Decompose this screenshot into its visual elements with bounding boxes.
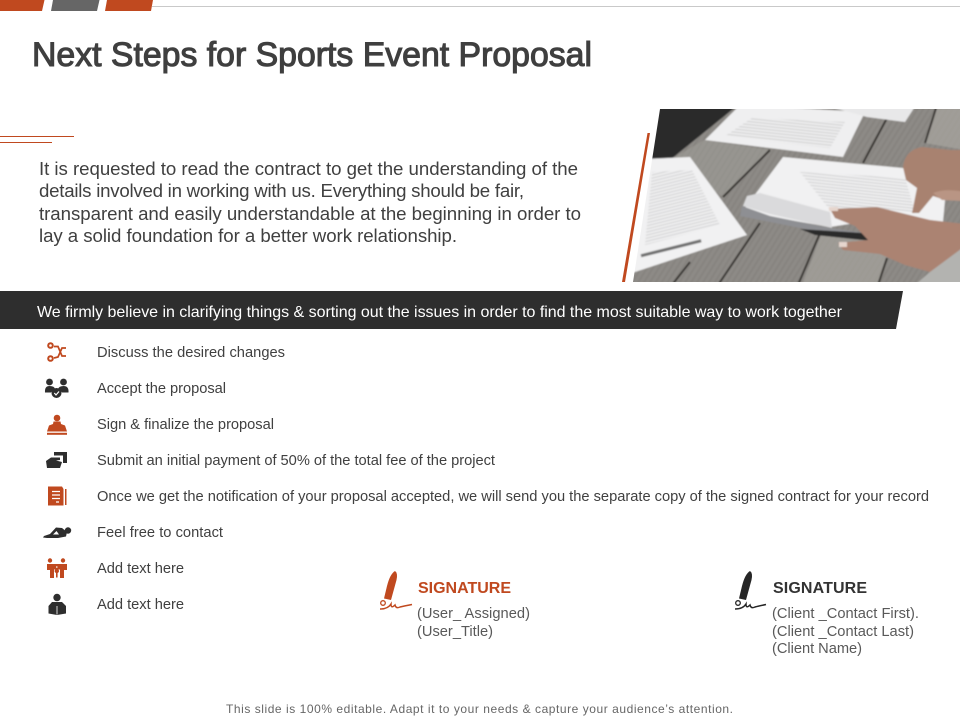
signature block: client: (Client _Contact First). [772, 606, 919, 622]
lighter planks [803, 236, 886, 282]
paper top [705, 105, 865, 157]
signature block: user: SIGNATURE [418, 580, 511, 597]
icon: person reading [48, 594, 66, 615]
dark background corner [652, 109, 734, 160]
list item: initial payment: Submit an initial payment of 50% of the total fee of the project [97, 453, 495, 469]
document centre [742, 157, 945, 227]
banner: We firmly believe in clarifying things & sorting out the issues in order to find the most suitable way to work together [37, 304, 843, 321]
footer note: This slide is 100% editable. Adapt it to your needs & capture your audience’s attention. [226, 702, 733, 716]
icon: handshake silhouette [43, 527, 71, 538]
icon: people with keyhole [47, 558, 67, 578]
list item: add text two: Add text here [97, 597, 184, 613]
list item: sign proposal [47, 415, 274, 435]
list item: add text one: Add text here [97, 561, 184, 577]
icon: black pen [735, 571, 766, 609]
list item: signed copy: Once we get the notification of your proposal accepted, we will send you the separate copy of the signed contract for your record [97, 489, 929, 505]
intro paragraph [39, 158, 581, 246]
photo accent slash [622, 133, 650, 282]
list item: accept proposal [45, 379, 226, 398]
intro paragraph: It is requested to read the contract to get the understanding of the [39, 158, 578, 179]
signature block: client: SIGNATURE [773, 580, 867, 597]
intro paragraph: transparent and easily understandable at the beginning in order to [39, 203, 581, 224]
list item: add text one [47, 558, 184, 578]
header accent bars [0, 0, 960, 11]
icon: people with check [45, 379, 69, 398]
icon: hand with card [46, 452, 67, 468]
signature block: client [735, 571, 919, 657]
photo: hands reading contract on wooden table [633, 109, 960, 282]
icon: person at desk [47, 415, 67, 435]
paper left [625, 157, 747, 272]
signature block: client: (Client Name) [772, 641, 862, 657]
signature block: user: (User_Title) [417, 624, 493, 640]
sleeve [918, 249, 960, 282]
icon: document [48, 486, 66, 506]
icon: gears and arrows [48, 343, 66, 361]
list item: accept proposal: Accept the proposal [97, 381, 226, 397]
list item: discuss changes: Discuss the desired changes [97, 345, 285, 361]
hand right pointing [903, 147, 960, 213]
hand lower [830, 207, 960, 272]
signature block: client: (Client _Contact Last) [772, 624, 914, 640]
list item: sign proposal: Sign & finalize the proposal [97, 417, 274, 433]
list item: contact: Feel free to contact [97, 525, 223, 541]
signature block: user [380, 571, 530, 640]
accent lines [0, 136, 74, 143]
title: Next Steps for Sports Event Proposal [32, 36, 592, 74]
signature block: user: (User_ Assigned) [417, 606, 530, 622]
list item: add text two [48, 594, 184, 615]
banner [0, 291, 903, 329]
icon: orange pen [380, 571, 412, 609]
plank gaps [672, 105, 937, 285]
intro paragraph: lay a solid foundation for a better work relationship. [39, 225, 457, 246]
intro paragraph: details involved in working with us. Everything should be fair, [39, 180, 524, 201]
